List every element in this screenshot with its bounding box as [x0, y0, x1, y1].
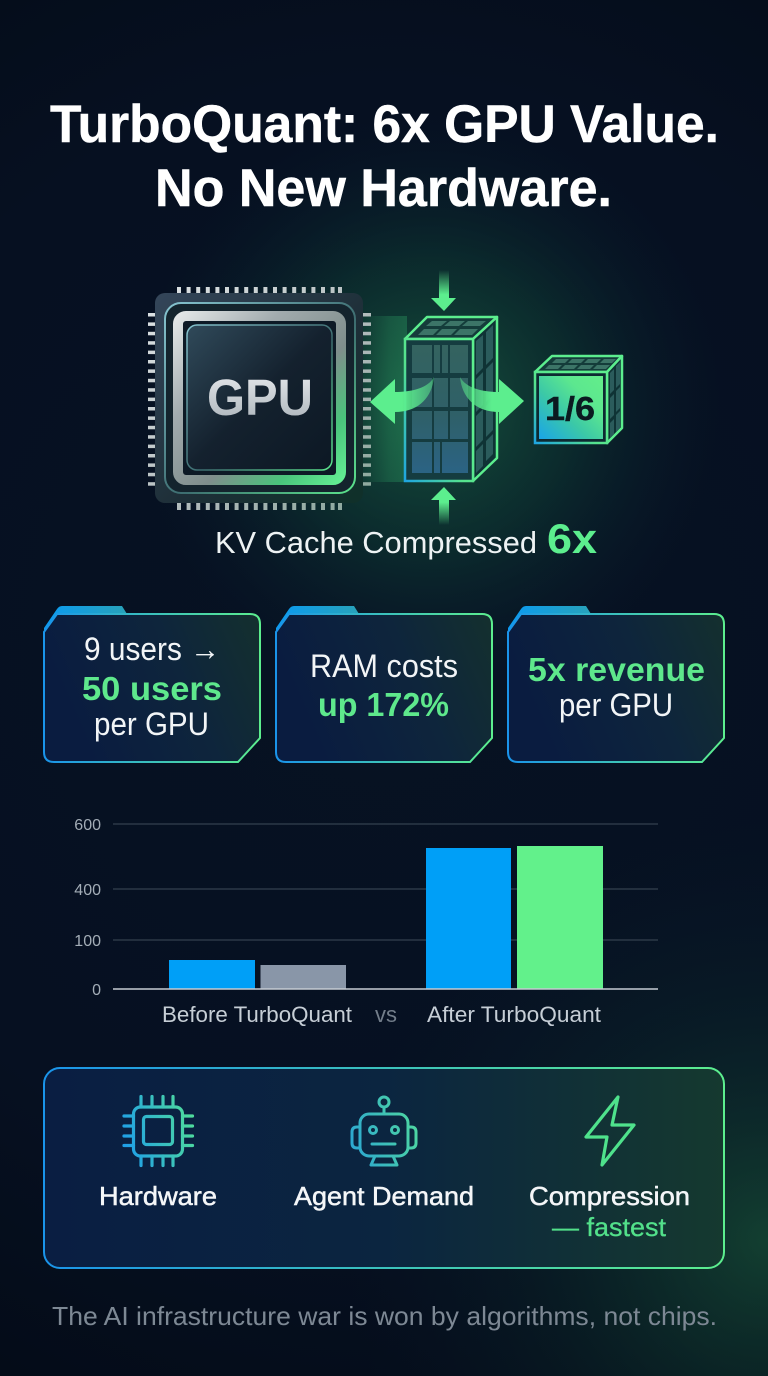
panel: RAM costs: RAM costs — [310, 648, 458, 684]
y axis labels: 100 — [74, 933, 101, 950]
label: agent demand: Agent Demand — [294, 1181, 474, 1211]
arrow: compress down — [431, 270, 456, 311]
icon: robot — [352, 1097, 416, 1165]
panel: RAM costs — [276, 606, 492, 762]
arrow: curved left — [370, 377, 434, 424]
panel: users per GPU: 50 users — [82, 670, 222, 707]
x axis labels: Before TurboQuant — [162, 1002, 353, 1027]
bar: after, green — [517, 846, 603, 989]
icon: GPU chip — [148, 287, 371, 510]
panel: revenue per GPU: 5x revenue — [528, 651, 705, 688]
panel: drivers — [44, 1068, 724, 1268]
light beam from GPU to cache — [363, 316, 407, 482]
y axis labels: 0 — [92, 982, 101, 999]
title: TurboQuant: 6x GPU Value. — [50, 95, 719, 154]
bar chart — [74, 817, 658, 1027]
title: No New Hardware. — [155, 159, 612, 218]
hero illustration: GPU and KV cache compression — [148, 270, 622, 525]
label: compression fastest: — fastest — [552, 1212, 667, 1242]
y axis labels — [74, 817, 101, 999]
panel: users per GPU: per GPU — [94, 706, 209, 742]
x axis labels: After TurboQuant — [427, 1002, 602, 1027]
title — [50, 95, 719, 218]
icon: KV cache tower — [405, 317, 497, 481]
bar: after, blue — [426, 848, 511, 989]
bar: before, blue — [169, 960, 255, 989]
x axis labels — [162, 1002, 602, 1027]
label: compression fastest: Compression — [529, 1181, 690, 1211]
caption: KV cache compressed 6x: 6x — [547, 515, 598, 562]
icon: compressed 1/6 cube: 1/6 — [545, 390, 595, 427]
icon: compressed 1/6 cube — [535, 356, 622, 443]
arrow: curved right — [460, 377, 524, 424]
caption: KV cache compressed 6x: KV Cache Compressed — [215, 525, 537, 560]
icon: hardware chip — [124, 1096, 192, 1166]
caption: KV cache compressed 6x — [215, 515, 598, 562]
panel: RAM costs: up 172% — [318, 686, 449, 723]
label: hardware: Hardware — [99, 1181, 217, 1211]
chip label: GPU — [207, 369, 313, 426]
y axis labels: 600 — [74, 817, 101, 834]
x axis labels: vs — [375, 1002, 397, 1027]
panel: revenue per GPU — [508, 606, 724, 762]
bar: before, grey — [260, 965, 346, 989]
label: compression fastest — [529, 1181, 690, 1242]
panel: revenue per GPU: per GPU — [559, 687, 673, 723]
arrow: compress up — [431, 487, 456, 525]
panel: users per GPU — [44, 606, 260, 762]
footer text: The AI infrastructure war is won by algorithms, not chips. — [52, 1301, 717, 1331]
icon: lightning bolt — [586, 1097, 634, 1165]
panel: users per GPU: 9 users → — [84, 631, 220, 667]
y axis labels: 400 — [74, 882, 101, 899]
